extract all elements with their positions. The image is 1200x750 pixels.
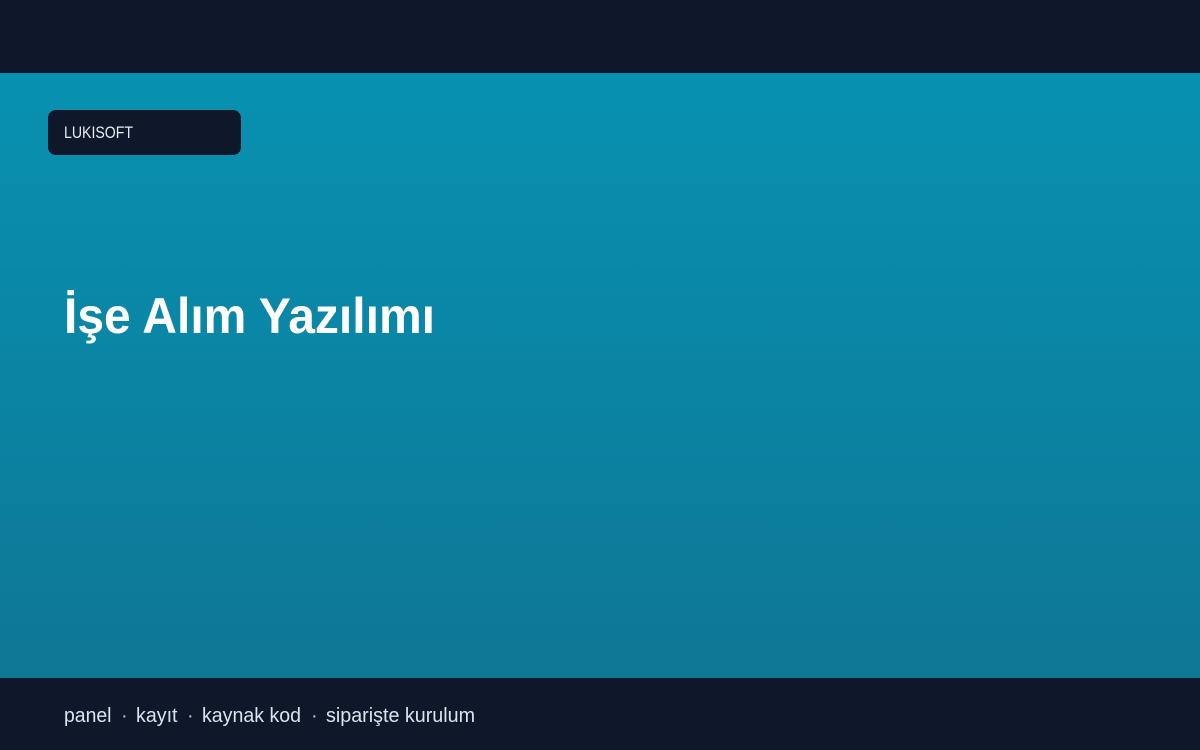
footer feature list: kaynak kod: [202, 705, 301, 727]
footer feature list: siparişte kurulum: [326, 705, 475, 727]
footer feature list: kayıt: [136, 705, 178, 727]
title: İşe Alım Yazılımı: [64, 288, 435, 344]
footer feature list: [64, 705, 475, 727]
footer feature list: panel: [64, 705, 112, 727]
brand badge: [48, 110, 241, 155]
top bar: [0, 0, 1200, 73]
footer feature list: ·: [121, 705, 128, 727]
footer feature list: ·: [311, 705, 318, 727]
footer feature list: ·: [187, 705, 194, 727]
footer bar: [0, 678, 1200, 750]
brand name: LUKISOFT: [64, 124, 133, 142]
